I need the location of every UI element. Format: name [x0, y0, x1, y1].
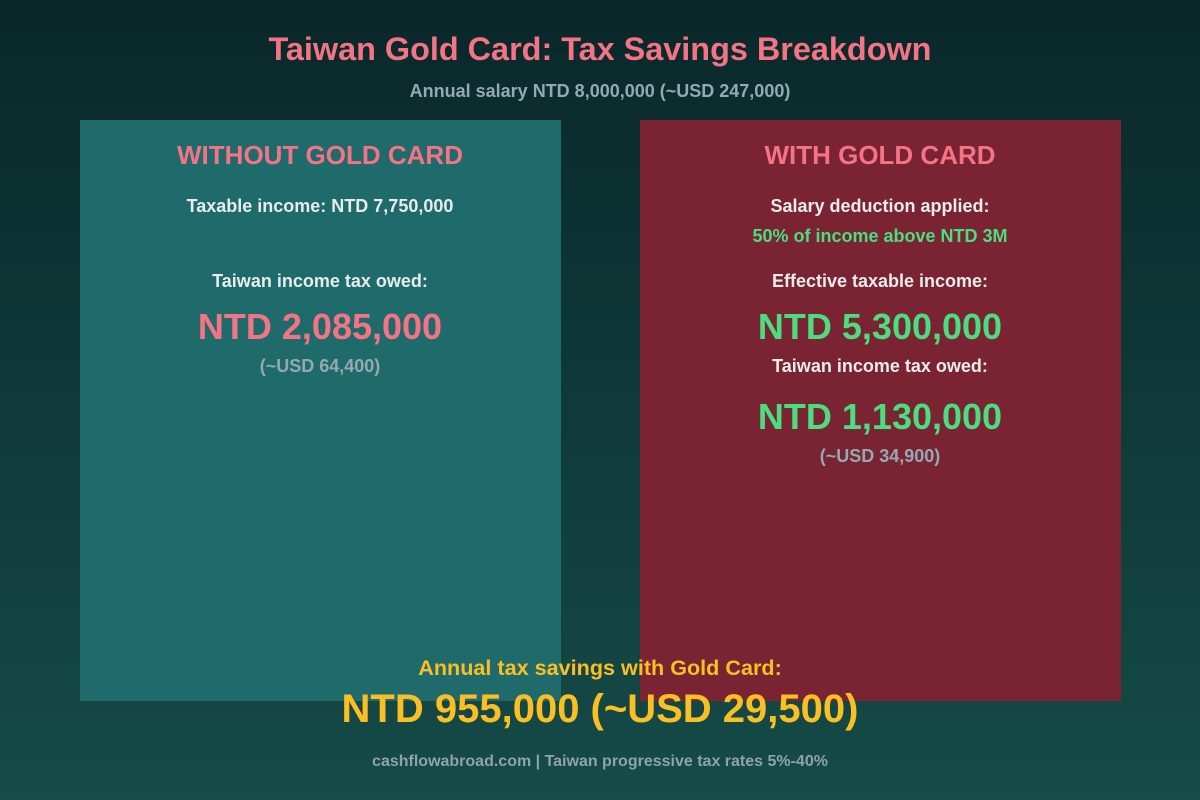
panel: with gold card: [640, 120, 1121, 701]
callout: annual savings: Annual tax savings with Gold Card:: [418, 655, 782, 680]
big number: tax owed: NTD 2,085,000: [198, 306, 442, 347]
big number: tax owed: NTD 1,130,000: [758, 396, 1002, 437]
text: deduction: Salary deduction applied:: [770, 196, 990, 216]
text: tax owed label: Taiwan income tax owed:: [772, 356, 988, 376]
text: usd equivalent: (~USD 34,900): [820, 446, 940, 466]
text: usd equivalent: (~USD 64,400): [260, 356, 380, 376]
big number: effective taxable: NTD 5,300,000: [758, 306, 1002, 347]
panel: without gold card: [80, 120, 561, 701]
text: effective taxable label: Effective taxable income:: [772, 271, 988, 291]
text: tax owed label: Taiwan income tax owed:: [212, 271, 428, 291]
heading: with: WITH GOLD CARD: [764, 140, 996, 170]
title: Taiwan Gold Card: Tax Savings Breakdown: [269, 31, 931, 67]
text: taxable income: Taxable income: NTD 7,750,000: [187, 196, 453, 216]
heading: without: WITHOUT GOLD CARD: [177, 140, 463, 170]
text: deduction detail: 50% of income above NTD 3M: [752, 226, 1008, 246]
subtitle: Annual salary NTD 8,000,000 (~USD 247,000): [410, 81, 790, 101]
callout: annual savings: [342, 655, 858, 731]
footer: cashflowabroad.com | Taiwan progressive tax rates 5%-40%: [372, 753, 828, 770]
callout: annual savings: NTD 955,000 (~USD 29,500): [342, 687, 858, 731]
